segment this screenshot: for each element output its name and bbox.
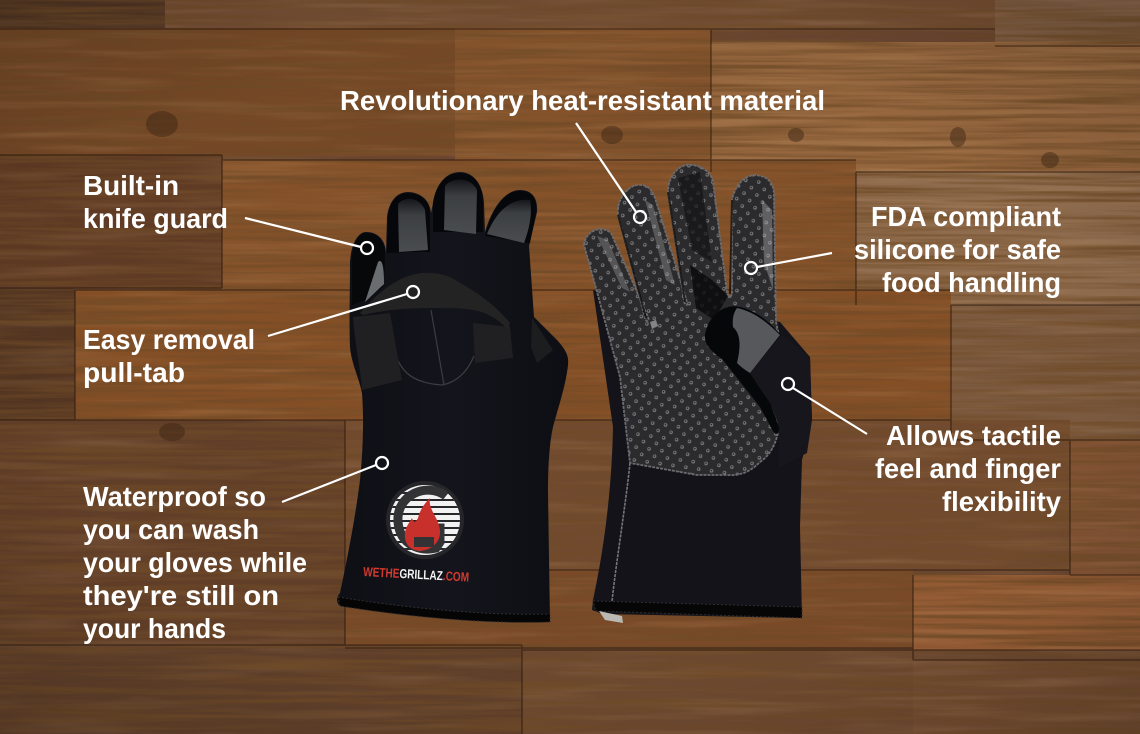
cuff band [593, 601, 802, 618]
label: Revolutionary heat-resistant material: Revolutionary heat-resistant material [340, 85, 825, 116]
label: Waterproof: they're still on [83, 580, 279, 611]
label: Revolutionary heat-resistant material [340, 85, 825, 223]
round logo badge [386, 481, 464, 559]
website wordmark: WETHEGRILLAZ.COM [363, 564, 469, 585]
label: Waterproof [83, 457, 388, 644]
ribbed cuff [338, 597, 550, 622]
label: Allows tactile feel: feel and finger [875, 453, 1061, 484]
left glove: back of hand with logo [337, 172, 568, 622]
label: FDA compliant silicone [745, 201, 1061, 298]
pull-tab webbing [353, 273, 513, 390]
label: FDA compliant silicone: silicone for safe [854, 234, 1061, 265]
stitched seam on cuff [612, 463, 630, 602]
label: Easy removal pull-tab: Easy removal [83, 324, 255, 355]
label: Built-in knife guard: Built-in [83, 170, 179, 201]
label: Waterproof: your gloves while [83, 547, 307, 578]
label: Waterproof: you can wash [83, 514, 259, 545]
label: Easy removal pull-tab [83, 286, 419, 388]
label tag [599, 611, 623, 623]
neoprene thumb [750, 334, 812, 468]
neoprene seam [392, 310, 474, 385]
label: FDA compliant silicone: food handling [882, 267, 1061, 298]
label: Allows tactile feel: Allows tactile [886, 420, 1061, 451]
finger gap shadows [618, 192, 732, 318]
label: FDA compliant silicone: FDA compliant [871, 201, 1061, 232]
label: Easy removal pull-tab: pull-tab [83, 357, 185, 388]
label: Built-in knife guard [83, 170, 373, 254]
thumb gap with silicone [531, 318, 553, 363]
silicone palm with grip dots [584, 165, 780, 475]
silicone highlights and shadow [597, 172, 773, 329]
label: Waterproof: your hands [83, 613, 226, 644]
glove body [337, 172, 568, 622]
glossy fingertips [352, 173, 536, 305]
neoprene body [592, 290, 812, 618]
glossy thumb tip [705, 306, 781, 434]
label: Allows tactile feel [782, 378, 1061, 517]
right glove: silicone palm side [584, 165, 812, 623]
label: Waterproof: Waterproof so [83, 481, 266, 512]
label: Allows tactile feel: flexibility [942, 486, 1061, 517]
label: Built-in knife guard: knife guard [83, 203, 228, 234]
